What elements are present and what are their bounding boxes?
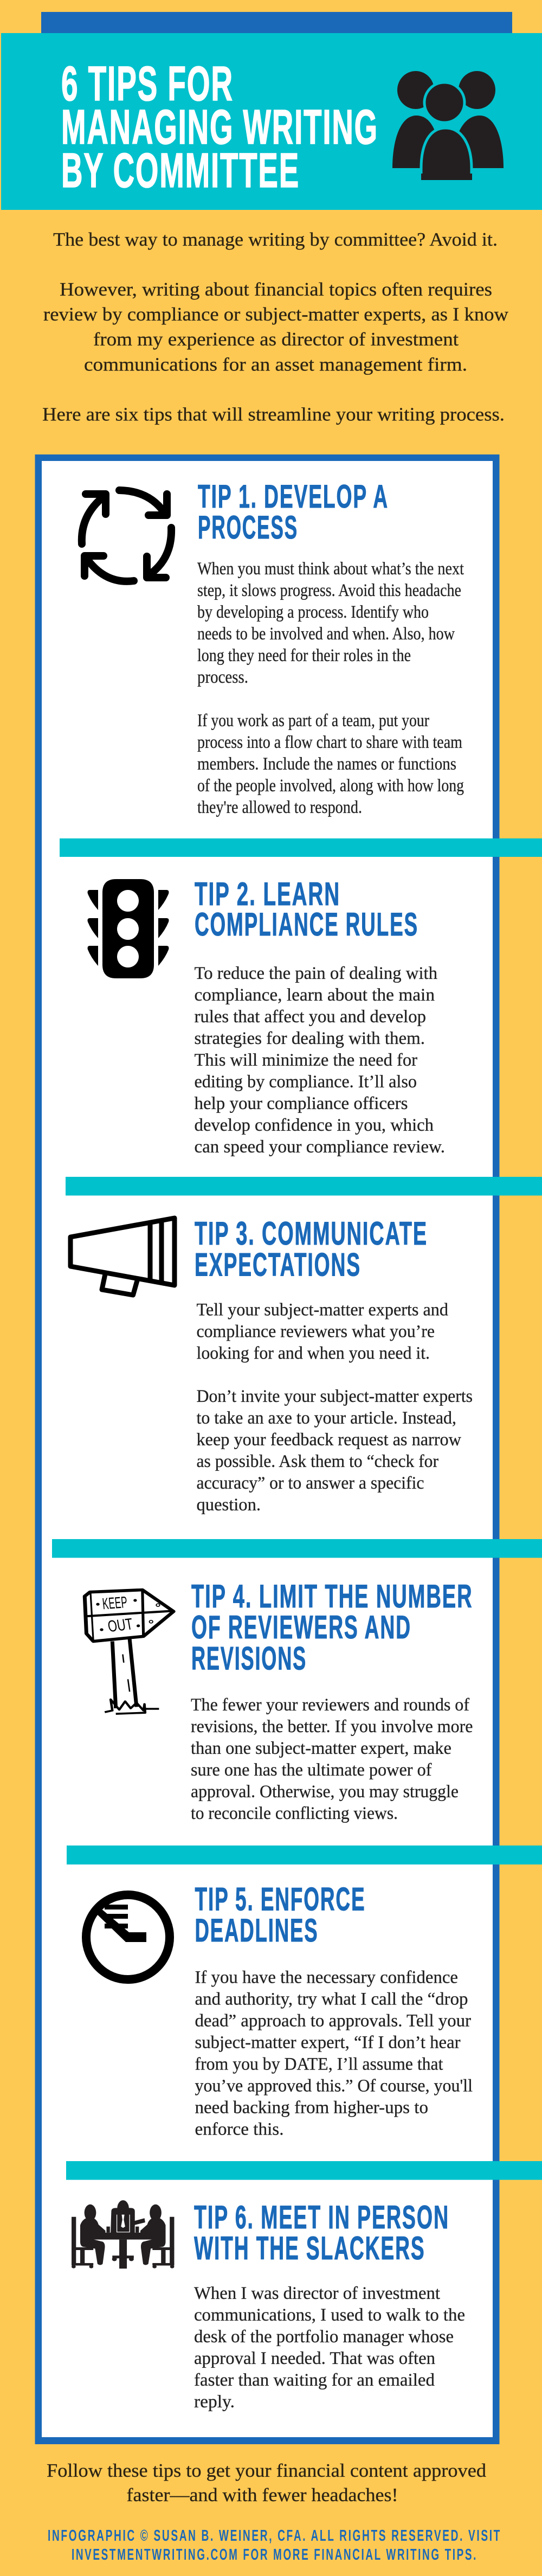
text: tip 6 body: reply.	[194, 2392, 235, 2412]
text: tip 5 body: subject-matter expert, “If I don’t hear	[195, 2033, 461, 2052]
intro text	[42, 229, 509, 425]
closing text: Follow these tips to get your financial content approved	[47, 2460, 487, 2481]
text: tip 1 body: If you work as part of a team, put your	[197, 711, 429, 730]
panel: tips frame	[35, 454, 500, 2444]
closing text: faster—and with fewer headaches!	[127, 2484, 398, 2505]
title	[61, 57, 378, 198]
footer credit	[48, 2527, 501, 2564]
text: tip 5 body: If you have the necessary confidence	[195, 1968, 458, 1987]
intro text: communications for an asset management firm.	[84, 354, 467, 375]
heading: tip 4: REVISIONS	[191, 1640, 307, 1677]
text: tip 1 body: process.	[197, 668, 248, 687]
text: tip 1 body: by developing a process. Identify who	[197, 603, 429, 622]
heading: tip 4	[191, 1578, 473, 1677]
heading: tip 1: PROCESS	[198, 509, 298, 546]
text: tip 3 body: accuracy” or to answer a specific	[196, 1473, 424, 1493]
text: tip 1 body: members. Include the names or functions	[197, 754, 456, 774]
heading: tip 3: EXPECTATIONS	[195, 1246, 361, 1283]
text: tip 1 body	[197, 559, 464, 817]
panel: tip 3	[70, 1215, 473, 1515]
text: tip 3 body: question.	[196, 1495, 261, 1515]
text: tip 2 body: This will minimize the need for	[194, 1050, 417, 1070]
text: tip 2 body: help your compliance officers	[194, 1094, 408, 1113]
text: tip 6 body: When I was director of investment	[194, 2284, 440, 2303]
intro text: However, writing about financial topics often requires	[60, 279, 492, 300]
text: tip 5 body: you’ve approved this.” Of course, you'll	[195, 2076, 473, 2096]
panel: tip 5	[86, 1881, 473, 2139]
heading: tip 2: TIP 2. LEARN	[195, 876, 340, 912]
intro text: The best way to manage writing by committee? Avoid it.	[53, 229, 498, 250]
text: tip 5 body: enforce this.	[195, 2119, 284, 2139]
icon: megaphone	[70, 1218, 175, 1295]
text: tip 1 body: they're allowed to respond.	[197, 798, 362, 817]
icon: keep out sign	[85, 1590, 173, 1714]
text: tip 6 body	[194, 2284, 465, 2412]
heading: tip 6	[194, 2199, 449, 2266]
intro text: from my experience as director of investment	[93, 329, 459, 350]
icon: circular arrows	[82, 490, 171, 581]
text: tip 2 body: develop confidence in you, which	[194, 1116, 434, 1135]
icon: clock	[86, 1895, 170, 1979]
text: tip 5 body: and authority, try what I call the “drop	[195, 1989, 468, 2009]
heading: tip 5: DEADLINES	[195, 1912, 319, 1949]
text: tip 1 body: When you must think about what’s the next	[197, 559, 464, 579]
text: tip 4 body: approval. Otherwise, you may struggle	[191, 1782, 459, 1802]
text: tip 2 body	[194, 964, 445, 1157]
text: tip 2 body: editing by compliance. It’ll also	[194, 1072, 417, 1092]
panel: tip 2	[88, 876, 445, 1157]
text: tip 4 body: to reconcile conflicting views.	[191, 1804, 398, 1823]
heading: tip 5: TIP 5. ENFORCE	[195, 1881, 365, 1918]
heading: tip 4: OF REVIEWERS AND	[191, 1609, 411, 1645]
text: tip 3 body: Don’t invite your subject-matter experts	[196, 1387, 473, 1406]
intro text: review by compliance or subject-matter experts, as I know	[43, 304, 509, 325]
text: tip 3 body: keep your feedback request as narrow	[196, 1430, 461, 1450]
text: tip 1 body: step, it slows progress. Avoid this headache	[197, 581, 461, 600]
text: tip 1 body: process into a flow chart to share with team	[197, 733, 462, 752]
text: tip 1 body: needs to be involved and when. Also, how	[197, 624, 455, 644]
text: tip 3 body: compliance reviewers what you’re	[196, 1322, 435, 1342]
text: tip 2 body: compliance, learn about the main	[194, 985, 435, 1005]
text: tip 1 body: of the people involved, along with how long	[197, 776, 464, 796]
text: tip 6 body: faster than waiting for an emailed	[194, 2370, 435, 2390]
text: tip 2 body: can speed your compliance review.	[194, 1137, 445, 1157]
icon: meeting at table	[72, 2200, 174, 2269]
text: tip 5 body: from you by DATE, I’ll assume that	[195, 2054, 443, 2074]
intro text: Here are six tips that will streamline your writing process.	[42, 403, 505, 425]
text: tip 4 body: revisions, the better. If you involve more	[191, 1717, 473, 1736]
text: tip 6 body: approval I needed. That was often	[194, 2349, 435, 2368]
text: tip 3 body: looking for and when you need it.	[196, 1344, 430, 1363]
text: tip 1 body: long they need for their roles in the	[197, 646, 411, 665]
text: tip 5 body: dead” approach to approvals. Tell your	[195, 2011, 471, 2030]
text: tip 3 body	[196, 1300, 473, 1515]
heading: tip 1: TIP 1. DEVELOP A	[198, 478, 389, 515]
text: tip 4 body: sure one has the ultimate power of	[191, 1760, 432, 1780]
text: tip 5 body	[195, 1968, 473, 2139]
icon: group of people	[392, 71, 504, 180]
icon: keep out sign: OUT	[106, 1616, 134, 1636]
text: tip 3 body: as possible. Ask them to “check for	[196, 1452, 438, 1471]
text: tip 6 body: communications, I used to walk to the	[194, 2305, 465, 2325]
text: tip 4 body: than one subject-matter expert, make	[191, 1739, 451, 1758]
text: tip 5 body: need backing from higher-ups to	[195, 2098, 428, 2117]
text: tip 6 body: desk of the portfolio manager whose	[194, 2327, 454, 2347]
title: 6 TIPS FOR	[61, 57, 234, 111]
text: tip 2 body: strategies for dealing with them.	[194, 1029, 425, 1048]
text: tip 2 body: To reduce the pain of dealing with	[194, 964, 437, 983]
panel: tip 6	[72, 2199, 465, 2412]
header banner	[1, 12, 542, 210]
text: tip 4 body	[191, 1695, 473, 1823]
text: tip 2 body: rules that affect you and develop	[194, 1007, 426, 1027]
heading: tip 3	[195, 1215, 428, 1283]
heading: tip 1	[198, 478, 389, 546]
text: tip 3 body: to take an axe to your article. Instead,	[196, 1408, 456, 1428]
heading: tip 2	[195, 876, 418, 943]
icon: traffic light	[88, 879, 169, 978]
title: BY COMMITTEE	[61, 144, 300, 198]
panel: tip 4	[85, 1578, 473, 1823]
text: tip 4 body: The fewer your reviewers and rounds of	[191, 1695, 469, 1715]
closing text	[47, 2460, 487, 2505]
panel: tip 1	[82, 478, 464, 817]
text: tip 3 body: Tell your subject-matter experts and	[196, 1300, 448, 1320]
heading: tip 5	[195, 1881, 365, 1949]
icon: keep out sign: KEEP	[101, 1594, 128, 1613]
